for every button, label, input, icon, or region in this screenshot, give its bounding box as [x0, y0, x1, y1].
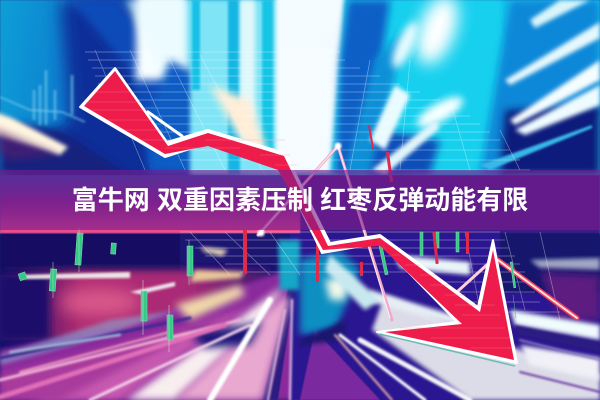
small chart and glare at left — [0, 70, 85, 160]
green candlesticks — [18, 228, 516, 352]
shadow under arrow — [380, 334, 515, 366]
title band — [0, 170, 600, 230]
radiating road light streaks — [0, 300, 600, 400]
glowing data points — [258, 142, 342, 236]
red falling arrow — [80, 68, 517, 363]
lower road background — [0, 175, 600, 400]
upper city background — [0, 0, 600, 235]
red candlesticks — [243, 125, 469, 282]
upper light streaks — [370, 0, 600, 175]
title text: 富牛网 双重因素压制 红枣反弹动能有限 — [72, 185, 528, 215]
thin white and pink trend lines — [148, 112, 577, 320]
perspective grid lines — [85, 50, 560, 320]
